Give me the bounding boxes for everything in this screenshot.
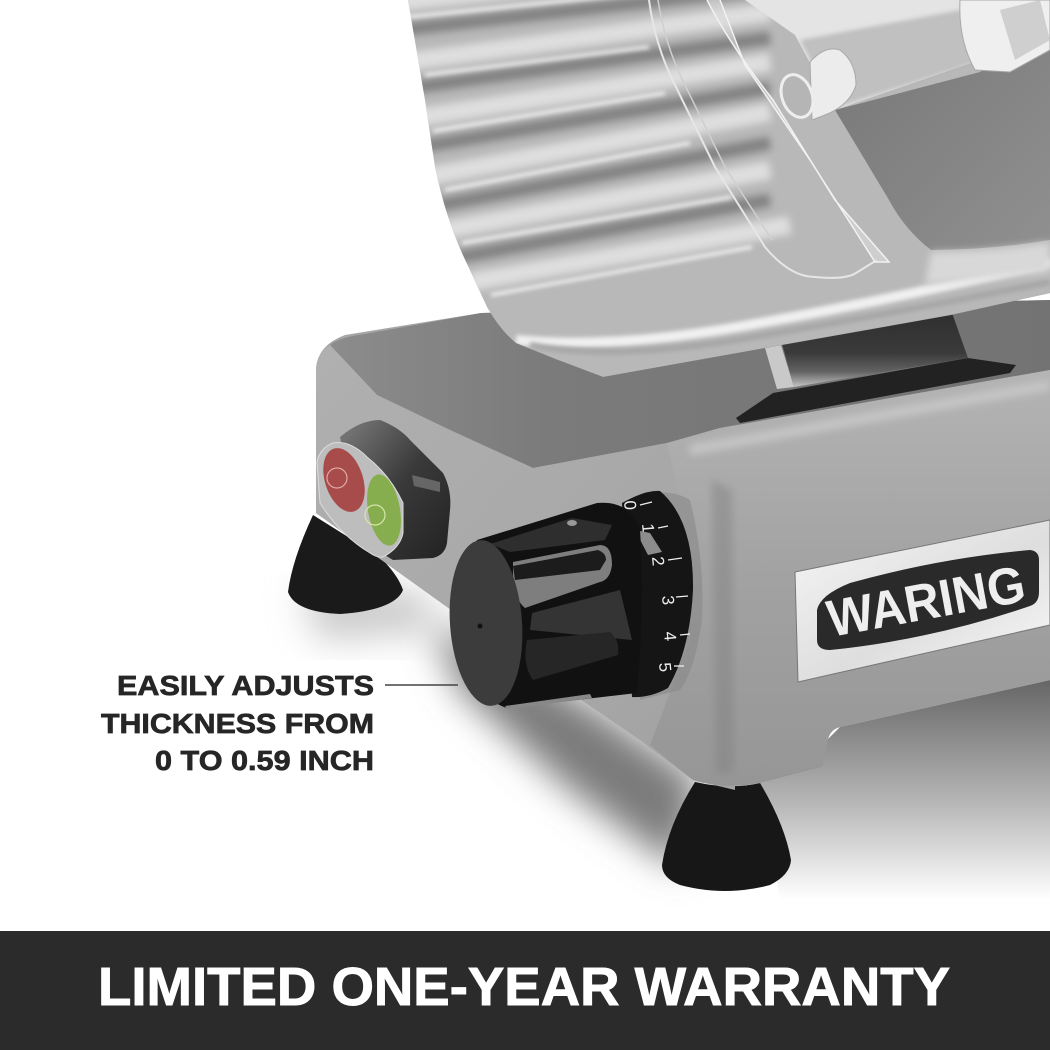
upper flute	[490, 518, 612, 552]
corner shading	[712, 480, 734, 775]
logo text: WARING	[823, 555, 1030, 649]
clear knob at top right	[960, 0, 1050, 72]
knob dot	[567, 520, 577, 526]
callout text: THICKNESS FROM	[101, 708, 374, 739]
slicer base	[316, 300, 1050, 790]
knob bottom edge	[505, 694, 592, 709]
dial numbers: 5	[655, 662, 675, 673]
lower flute	[525, 632, 618, 680]
carriage rib	[707, 0, 889, 262]
bright flute	[513, 545, 612, 608]
right foot	[662, 782, 791, 891]
blade ridges	[400, 0, 1050, 379]
central flute	[530, 590, 632, 640]
base top surface	[330, 300, 1050, 468]
power symbols	[327, 468, 347, 488]
mount foot plate	[736, 358, 1016, 423]
dial numbers: 3	[658, 595, 678, 606]
slide mount	[736, 310, 1016, 423]
clear upper area	[745, 0, 1050, 110]
Waring logo plate	[795, 520, 1050, 682]
scale window	[635, 530, 662, 555]
dial ticks	[640, 502, 690, 666]
dial ring	[622, 491, 693, 697]
grey band under clear panel	[800, 10, 1000, 108]
black logo badge	[817, 550, 1039, 650]
dial numbers: 2	[648, 556, 668, 567]
callout text: 0 TO 0.59 INCH	[155, 745, 374, 776]
housing highlight	[412, 475, 440, 492]
base silhouette backing	[316, 300, 1050, 786]
callout text: EASILY ADJUSTS	[117, 670, 374, 701]
disc centre wedge	[835, 28, 1050, 250]
translucent outer dial	[640, 492, 702, 700]
bright lower rim	[516, 262, 1050, 343]
switch housing	[340, 420, 450, 560]
mount side	[765, 345, 794, 389]
cap pinhole	[478, 624, 482, 628]
carriage outline	[649, 0, 877, 278]
inner carriage outline	[658, 0, 772, 240]
dial numbers: 4	[660, 631, 680, 642]
callout text	[101, 670, 374, 776]
top edge highlight	[690, 385, 1050, 450]
clear switch cover	[317, 443, 403, 557]
floor shadow under slicer	[300, 590, 1050, 900]
power switch	[316, 420, 450, 560]
base right face	[650, 370, 1050, 786]
lower highlight	[925, 242, 1050, 285]
thickness knob	[444, 491, 702, 709]
dial numbers	[620, 500, 680, 673]
green button	[362, 472, 406, 548]
knob body	[460, 503, 642, 708]
callout: thickness	[101, 670, 458, 776]
leader line	[385, 684, 458, 686]
transparent food carriage	[649, 0, 1050, 285]
chrome plate	[795, 520, 1050, 682]
base left face	[316, 345, 735, 790]
warranty banner	[0, 931, 1050, 1050]
knob cap	[444, 538, 528, 708]
banner background	[0, 931, 1050, 1050]
dial numbers: 1	[638, 523, 658, 534]
banner text: LIMITED ONE-YEAR WARRANTY	[98, 957, 950, 1017]
flute shadow	[513, 550, 606, 580]
mount body	[781, 310, 968, 387]
dial numbers: 0	[620, 500, 640, 511]
blade guard	[400, 0, 1050, 380]
red button	[316, 443, 372, 517]
clear knob near centre	[775, 49, 856, 122]
left foot	[288, 515, 403, 614]
